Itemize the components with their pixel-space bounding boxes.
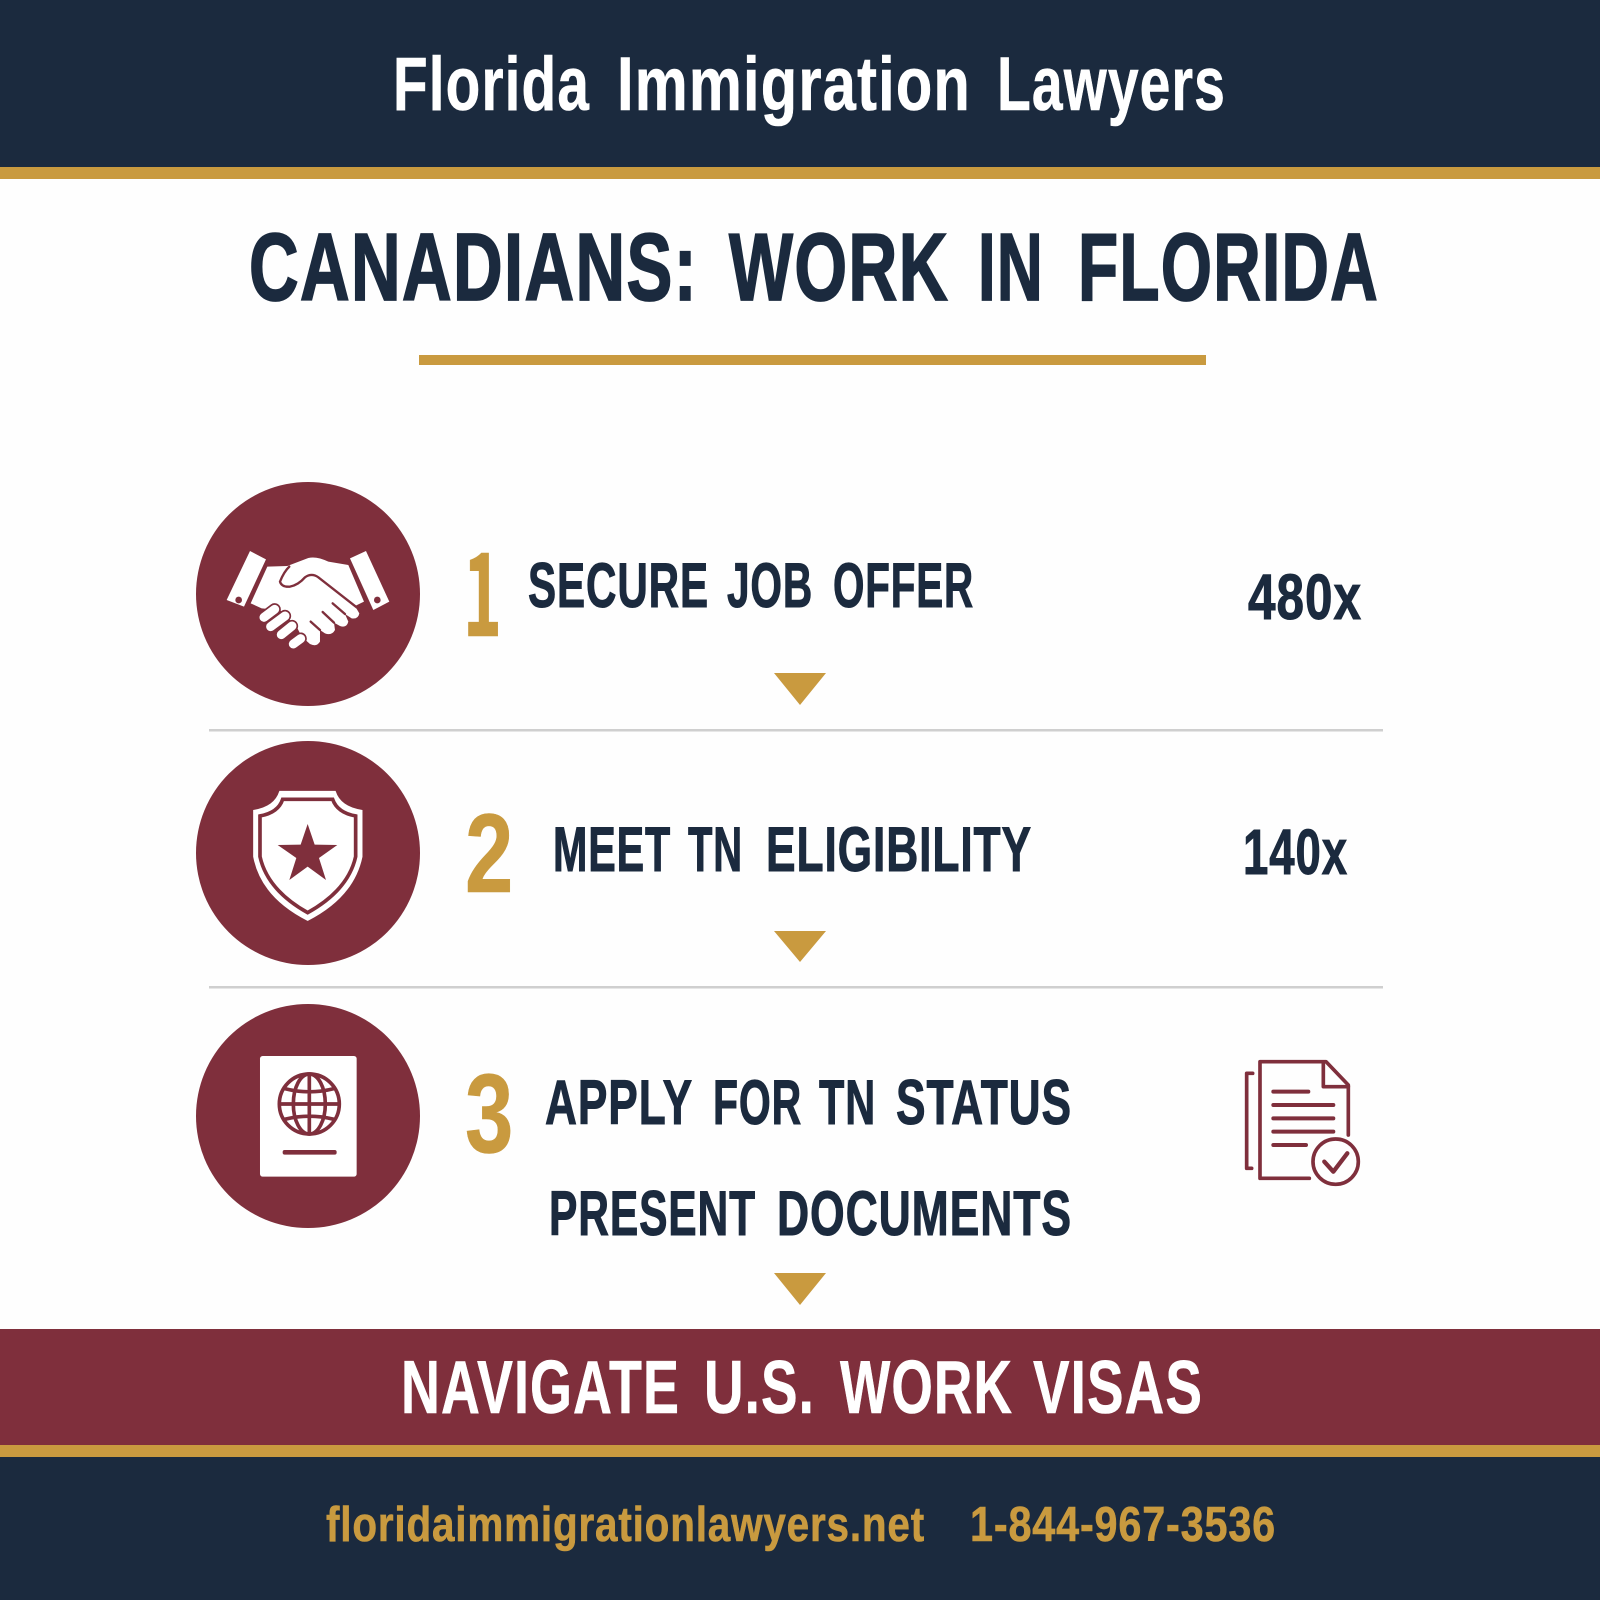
banner text xyxy=(401,1345,1203,1429)
call-to-action banner xyxy=(0,1329,1600,1457)
step 2 label xyxy=(553,815,1032,885)
header title: Florida xyxy=(393,42,590,127)
step 2 xyxy=(196,741,1348,965)
arrow 3 xyxy=(774,1273,826,1305)
step 3 label: TN xyxy=(819,1068,876,1138)
header title: Immigration xyxy=(617,42,971,127)
step 3 label: PRESENT xyxy=(549,1179,756,1249)
icon: document with check xyxy=(1247,1062,1358,1184)
step 2 label: MEET xyxy=(553,815,671,885)
footer xyxy=(0,1457,1600,1600)
step 3 label: FOR xyxy=(713,1068,802,1138)
banner text: NAVIGATE xyxy=(401,1345,680,1429)
main heading: FLORIDA xyxy=(1078,214,1379,321)
arrow 2 xyxy=(774,931,826,962)
header title: Lawyers xyxy=(997,42,1226,127)
banner text: WORK xyxy=(840,1345,1013,1429)
header band xyxy=(0,0,1600,179)
arrow 1 xyxy=(774,673,826,705)
icon: passport xyxy=(196,1004,420,1228)
banner text: U.S. xyxy=(704,1345,815,1429)
step 1 xyxy=(196,482,1362,706)
main heading xyxy=(249,214,1379,321)
website: floridaimmigrationlawyers.net xyxy=(326,1498,925,1552)
step number 2: 2 xyxy=(465,791,515,916)
main heading: IN xyxy=(978,214,1044,321)
step 1 label: JOB xyxy=(727,551,813,621)
step 1 label: OFFER xyxy=(833,551,974,621)
step 2 label: TN xyxy=(688,815,743,885)
step number 1: 1 xyxy=(463,504,502,670)
step 1 label xyxy=(528,551,974,621)
heading underline xyxy=(419,355,1206,365)
step number 3: 3 xyxy=(465,1051,515,1176)
header title xyxy=(393,42,1226,127)
step 3 label: APPLY xyxy=(545,1068,693,1138)
icon: handshake xyxy=(196,482,420,706)
step 2 value: 140x xyxy=(1243,816,1348,888)
step 3 label: DOCUMENTS xyxy=(777,1179,1072,1249)
step 3 label xyxy=(545,1068,1072,1249)
main heading: WORK xyxy=(729,214,949,321)
step 1 value: 480x xyxy=(1248,561,1362,633)
banner text: VISAS xyxy=(1033,1345,1203,1429)
main heading: CANADIANS: xyxy=(249,214,698,321)
step 3 label: STATUS xyxy=(896,1068,1072,1138)
step 3 xyxy=(196,1004,1358,1249)
phone: 1-844-967-3536 xyxy=(970,1498,1276,1552)
step 1 label: SECURE xyxy=(528,551,709,621)
icon: shield with star xyxy=(196,741,420,965)
step 2 label: ELIGIBILITY xyxy=(766,815,1032,885)
